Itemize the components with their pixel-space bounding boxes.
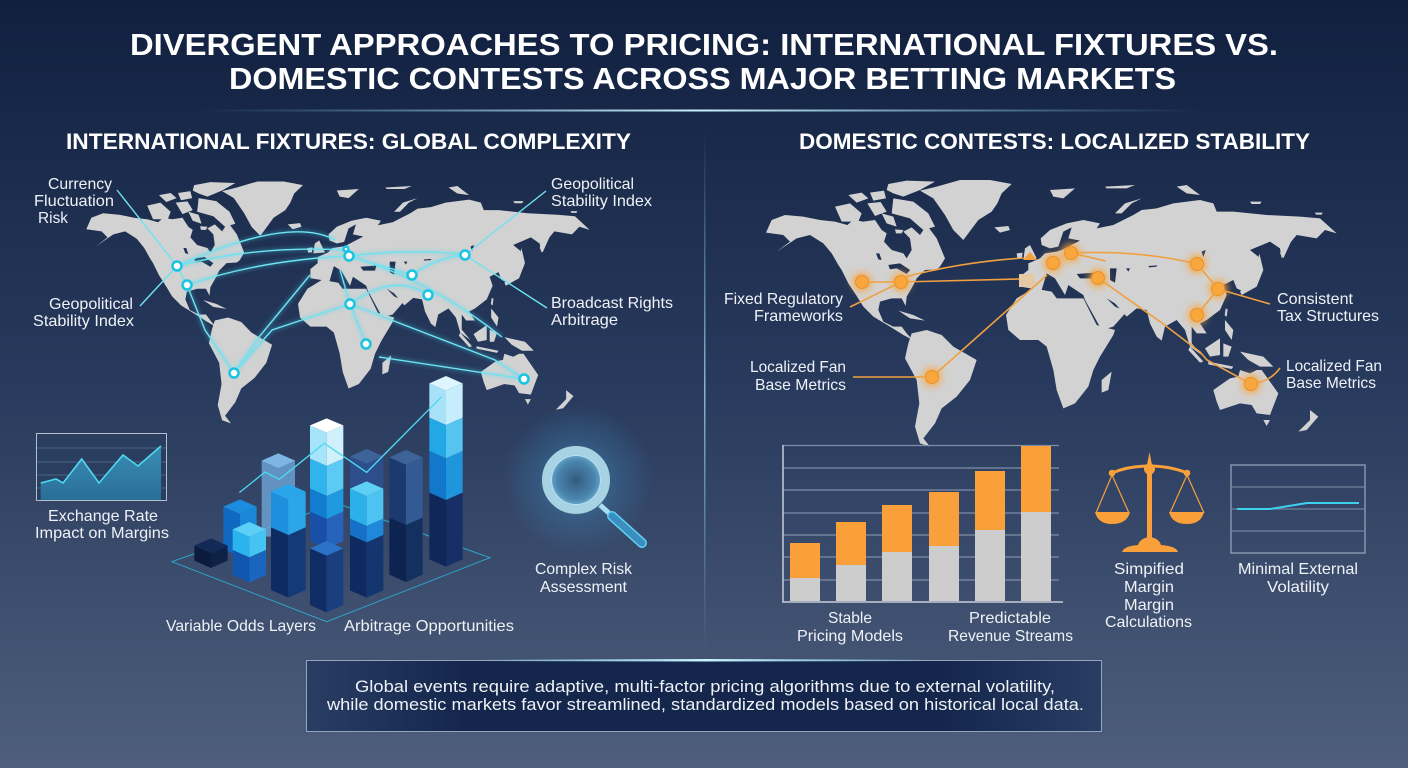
map labels: Stability Index [33,313,134,330]
map labels [724,291,1382,394]
chart: stacked orange and grey bars: Predictable [969,610,1051,627]
heading: domestic contests: DOMESTIC CONTESTS: LOCALIZED STABILITY [799,129,1310,154]
chart: minimal external volatility [1231,465,1365,596]
map labels: Base Metrics [1286,375,1376,392]
text: simplified margin calculations: Margin [1124,597,1174,614]
title [130,27,1278,96]
map labels: Tax Structures [1277,308,1379,325]
world map with teal network [86,181,590,423]
map labels: Frameworks [754,308,843,325]
chart: exchange rate impact [35,434,169,542]
chart: minimal external volatility: Minimal External [1238,561,1358,578]
chart: isometric stacked bars [172,376,490,622]
chart: exchange rate impact: Exchange Rate [48,508,158,525]
text: simplified margin calculations: Margin [1124,579,1174,596]
panel: international fixtures [33,129,673,635]
chart: stacked orange and grey bars: Pricing Models [797,628,903,645]
title: DIVERGENT APPROACHES TO PRICING: INTERNATIONAL FIXTURES VS. [130,27,1278,62]
network nodes [853,244,1260,393]
chart: minimal external volatility: Volatility [1267,579,1329,596]
map labels: Fixed Regulatory [724,291,843,308]
bar chart labels [166,618,514,635]
icon: magnifying glass [503,405,653,555]
text: simplified margin calculations: Calculations [1105,614,1192,631]
bar chart labels: Variable Odds Layers [166,618,316,635]
text: simplified margin calculations [1105,561,1192,631]
map labels: Geopolitical [49,296,133,313]
network nodes [172,246,528,384]
chart: stacked orange and grey bars: Revenue Streams [948,628,1073,645]
map labels: Consistent [1277,291,1354,308]
callout: summary [306,659,1102,732]
text: complex risk assessment: Complex Risk [535,561,633,578]
map labels: Stability Index [551,193,652,210]
bar chart labels: Arbitrage Opportunities [344,618,514,635]
panel: domestic contests [724,129,1382,645]
title: DOMESTIC CONTESTS ACROSS MAJOR BETTING MARKETS [229,61,1176,96]
map labels: Localized Fan [1286,358,1382,375]
chart: exchange rate impact: Impact on Margins [35,525,169,542]
callout: summary: while domestic markets favor streamlined, standardized models based on historical local data. [326,695,1084,714]
text: complex risk assessment: Assessment [540,579,628,596]
map labels: Base Metrics [755,377,846,394]
heading: international fixtures: INTERNATIONAL FIXTURES: GLOBAL COMPLEXITY [66,129,631,154]
map labels: Currency [48,176,112,193]
chart: stacked orange and grey bars [783,445,1073,645]
map labels: Broadcast Rights [551,295,673,312]
text: simplified margin calculations: Simpified [1114,561,1184,578]
icon: balance scales [1095,452,1204,552]
map labels: Geopolitical [551,176,634,193]
map labels: Localized Fan [750,359,846,376]
map labels: Fluctuation [34,193,114,210]
map labels: Risk [38,210,69,227]
world map with orange network [766,180,1337,447]
chart: stacked orange and grey bars: Stable [828,610,872,627]
text: complex risk assessment [535,561,633,596]
callout: summary: Global events require adaptive, multi-factor pricing algorithms due to external volatility, [355,677,1055,696]
map labels [33,176,673,330]
map labels: Arbitrage [551,312,618,329]
